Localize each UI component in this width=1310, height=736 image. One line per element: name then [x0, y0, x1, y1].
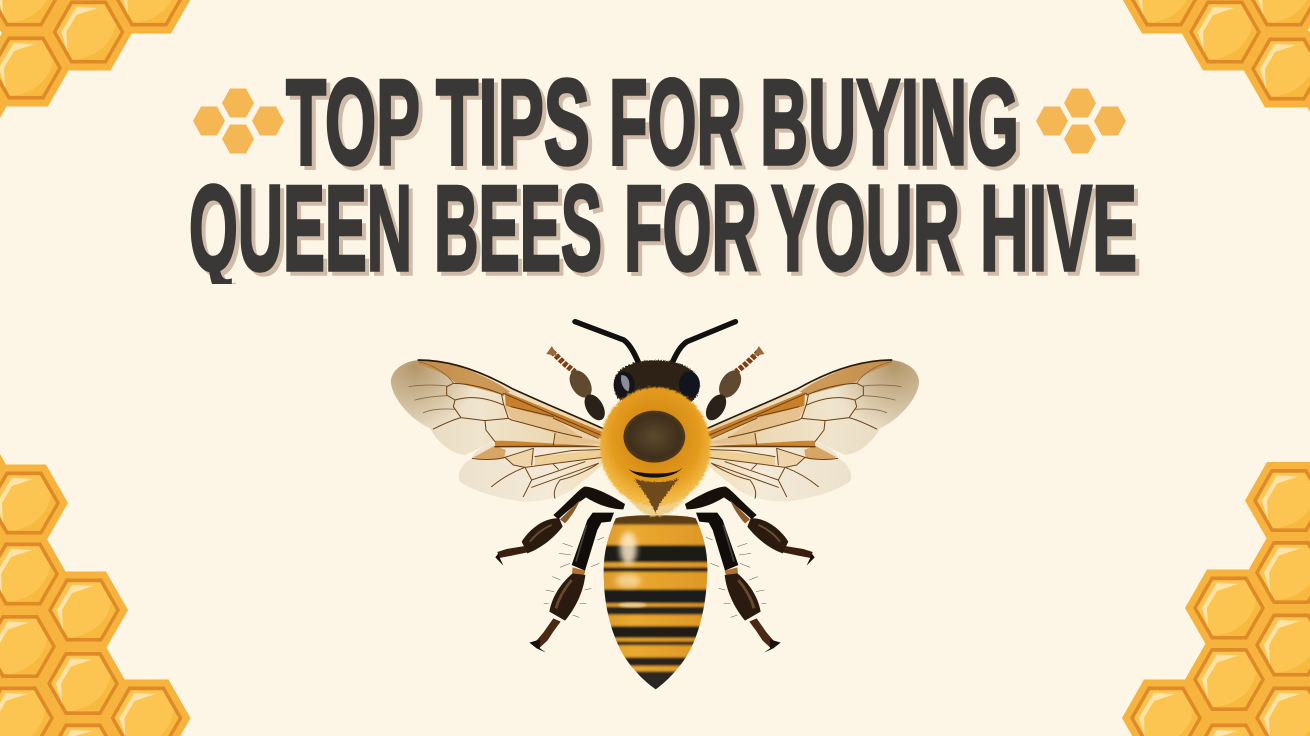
- title: TIPS: [436, 54, 590, 190]
- thorax: [600, 387, 711, 516]
- title: BUYING: [760, 54, 1019, 190]
- icon: small hexagon cluster left of title: [193, 88, 284, 154]
- antennae: [575, 322, 735, 369]
- title: FOR: [609, 54, 742, 190]
- illustration: queen bee: [391, 322, 919, 697]
- legs: [495, 487, 815, 653]
- honeycomb: bottom left corner: [0, 430, 190, 736]
- title: YOUR: [771, 160, 960, 296]
- head: [614, 360, 700, 407]
- title: FOR: [624, 160, 757, 296]
- title: HIVE: [980, 160, 1137, 296]
- body: [546, 322, 764, 697]
- title: TOP: [286, 54, 420, 190]
- wings: [391, 360, 919, 502]
- front legs: [546, 346, 764, 423]
- honeycomb: bottom right corner: [1122, 462, 1310, 736]
- honeycomb: top left corner: [0, 0, 193, 142]
- title: QUEEN: [189, 160, 412, 296]
- title: [190, 77, 1140, 284]
- honeycomb: top right corner: [1120, 0, 1310, 144]
- icon: small hexagon cluster right of title: [1036, 88, 1126, 154]
- abdomen: [604, 515, 708, 690]
- title: BEES: [434, 160, 602, 296]
